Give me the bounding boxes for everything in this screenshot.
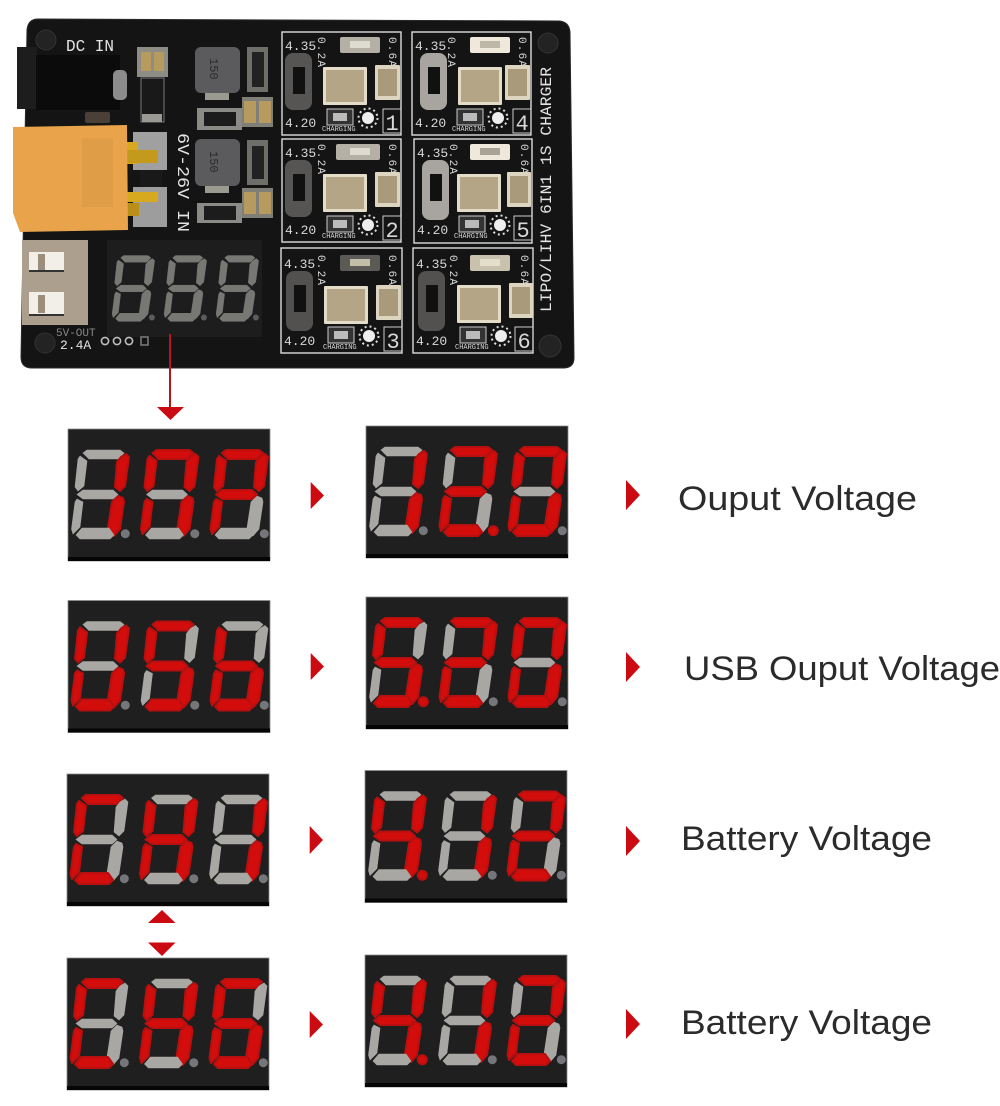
display: 4.12 battery voltage value channel 6 bbox=[365, 955, 567, 1087]
arrow: row 1 right bbox=[626, 480, 640, 510]
inductor upper bbox=[195, 47, 240, 100]
charger cell 3 bbox=[281, 248, 402, 355]
display: U S B prompt bbox=[68, 600, 270, 732]
arrow: row 2 right bbox=[626, 652, 640, 682]
charger cell 5: CHARGING bbox=[454, 233, 488, 241]
display: C H 6 channel prompt bbox=[67, 958, 269, 1090]
6V-26V IN label: 6V-26V IN bbox=[172, 133, 191, 232]
inductor lower: 150 bbox=[206, 151, 220, 173]
charger cell 6: 0.2A bbox=[446, 255, 458, 285]
charger cell 5: 0.2A bbox=[446, 144, 458, 174]
arrow: row 3 middle bbox=[310, 826, 323, 854]
panel: charger circuit board bbox=[13, 19, 574, 368]
diodes and capacitors lower bbox=[197, 140, 273, 223]
charger cell 1: 4.35 bbox=[285, 39, 316, 54]
USB output port bbox=[22, 240, 88, 325]
charger cell 1 bbox=[282, 32, 401, 137]
charger cell 4 bbox=[412, 32, 531, 137]
display: 12.0 output voltage value bbox=[366, 426, 568, 558]
charger cell 2: 4.35 bbox=[285, 146, 316, 161]
charger cell 3: 4.20 bbox=[284, 334, 315, 349]
charger cell 2: 2 bbox=[386, 219, 399, 244]
charger cell 6: CHARGING bbox=[455, 344, 489, 352]
arrow: row 3 right bbox=[626, 826, 640, 856]
charger cell 2 bbox=[282, 139, 401, 244]
header pads bbox=[101, 337, 148, 345]
charger cell 1: CHARGING bbox=[322, 126, 356, 134]
charger cell 1: 4.20 bbox=[285, 116, 316, 131]
charger cell 5: 5 bbox=[516, 219, 530, 244]
diodes and capacitors upper bbox=[197, 47, 273, 130]
board 7-segment display bbox=[107, 240, 262, 337]
charger cell 1: 0.2A bbox=[314, 37, 326, 67]
label: output voltage: Ouput Voltage bbox=[678, 480, 917, 518]
charger cell 4: CHARGING bbox=[452, 126, 486, 134]
charger cell 6 bbox=[413, 248, 533, 355]
display: C H 1 channel prompt bbox=[67, 774, 269, 906]
inductor lower bbox=[195, 139, 240, 193]
inductor upper: 150 bbox=[206, 58, 220, 80]
charger cell 6: 0.6A bbox=[517, 255, 529, 285]
charger cell 3: 0.6A bbox=[385, 255, 397, 285]
charger cell 4: 4.20 bbox=[415, 116, 446, 131]
charger cell 4: 0.2A bbox=[444, 37, 456, 67]
arrow: board display to readouts bbox=[157, 334, 184, 420]
charger title label: LIPO/LIHV 6IN1 1S CHARGER bbox=[538, 67, 556, 312]
charger cell 1: 1 bbox=[386, 112, 399, 137]
charger cell 4: 4 bbox=[516, 112, 529, 137]
label: USB output voltage: USB Ouput Voltage bbox=[684, 650, 1000, 688]
arrow: row 4 right bbox=[626, 1009, 640, 1039]
charger cell 2: CHARGING bbox=[322, 233, 356, 241]
label: battery voltage channel 6: Battery Voltage bbox=[681, 1004, 932, 1042]
charger cell 4: 0.6A bbox=[515, 37, 527, 67]
charger cell 2: 0.2A bbox=[314, 144, 326, 174]
charger cell 6: 4.35 bbox=[416, 257, 447, 272]
charger cell 2: 4.20 bbox=[285, 223, 316, 238]
label: battery voltage channel 1: Battery Voltage bbox=[681, 820, 932, 858]
display: 4.12 battery voltage value bbox=[365, 770, 567, 902]
icon: corner screws bbox=[35, 30, 561, 357]
charger cell 2: 0.6A bbox=[385, 144, 397, 174]
charger cell 1: 0.6A bbox=[385, 37, 397, 67]
charger cell 5 bbox=[414, 139, 532, 244]
charger cell 6: 4.20 bbox=[416, 334, 447, 349]
charger cell 6: 6 bbox=[518, 330, 531, 355]
arrow: row 1 middle bbox=[311, 482, 324, 509]
XT60 power connector bbox=[13, 125, 167, 232]
charger cell 5: 0.6A bbox=[517, 144, 529, 174]
charger cell 3: 0.2A bbox=[314, 255, 326, 285]
USB output label bbox=[56, 328, 96, 353]
display: 5.20 USB voltage value bbox=[366, 597, 568, 729]
charger cell 3: CHARGING bbox=[323, 344, 357, 352]
display: 1 7 P output prompt bbox=[68, 429, 270, 561]
charger cell 3: 3 bbox=[386, 330, 400, 355]
USB output label: 5V-OUT bbox=[56, 328, 96, 340]
arrow: row 2 middle bbox=[311, 653, 324, 680]
USB output label: 2.4A bbox=[60, 338, 91, 353]
charger cell 4: 4.35 bbox=[415, 39, 446, 54]
DC IN label: DC IN bbox=[66, 38, 114, 57]
arrow: row 4 middle bbox=[310, 1011, 323, 1038]
charger cell 5: 4.20 bbox=[417, 223, 448, 238]
charger cell 3: 4.35 bbox=[284, 257, 315, 272]
DC jack connector bbox=[17, 47, 127, 123]
top capacitors bbox=[137, 47, 168, 122]
arrow: channel up and down bbox=[148, 910, 176, 956]
charger cell 5: 4.35 bbox=[417, 146, 448, 161]
